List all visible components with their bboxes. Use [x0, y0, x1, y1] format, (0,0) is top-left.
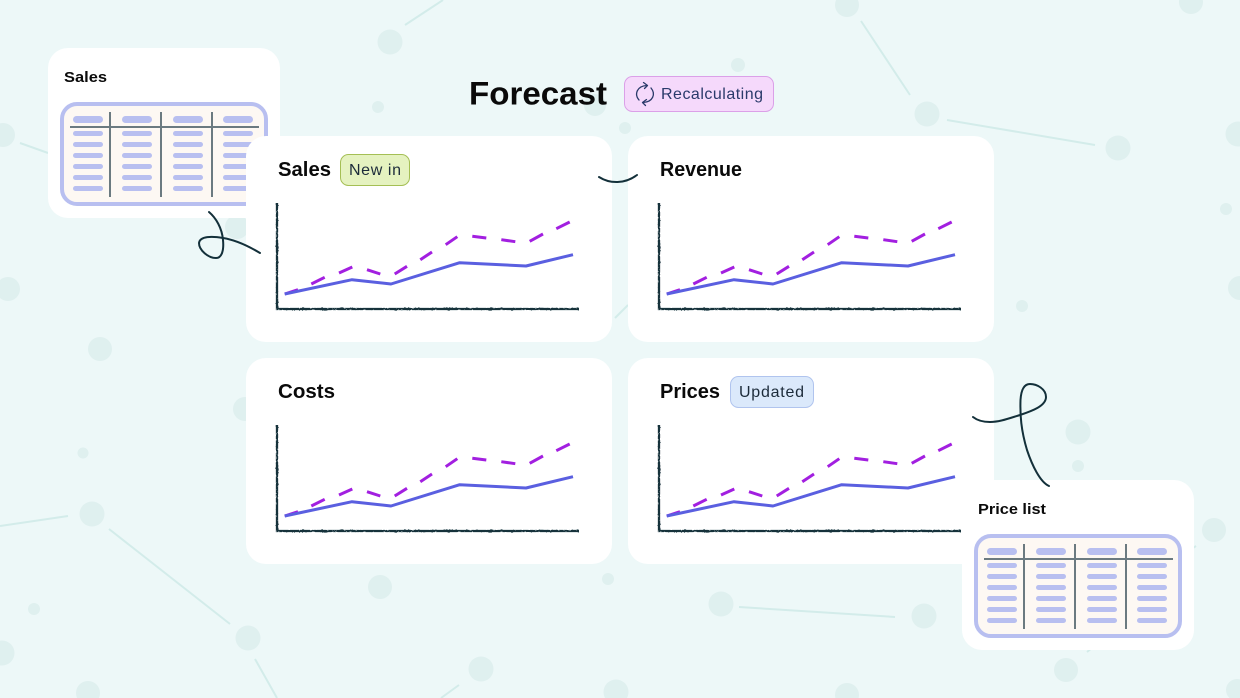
badge: updated — [730, 376, 814, 408]
badge: recalculating — [624, 76, 774, 112]
title: Forecast — [469, 76, 607, 112]
connector: sales table to sales chart — [199, 212, 260, 258]
heading: sales table: Sales — [64, 69, 107, 86]
line chart: revenue — [659, 203, 961, 309]
panel: price list table card — [962, 480, 1194, 650]
badge text: Recalculating — [661, 86, 763, 103]
line chart: sales — [277, 203, 579, 309]
table: price list data — [976, 536, 1180, 636]
line chart: prices — [659, 425, 961, 531]
line chart: costs — [277, 425, 579, 531]
panel: sales source table card — [48, 48, 280, 218]
badge: new in: New in — [349, 162, 401, 179]
panel: revenue chart card — [628, 136, 994, 342]
panel: sales chart card — [246, 136, 612, 342]
badge: updated: Updated — [739, 384, 804, 401]
heading: price list: Price list — [978, 501, 1046, 518]
heading: revenue: Revenue — [660, 159, 742, 181]
badge: new in — [340, 154, 410, 186]
connector: prices chart to price list — [973, 384, 1049, 486]
icon: refresh arrows — [637, 82, 653, 106]
connector: sales chart to revenue chart — [599, 175, 637, 182]
heading: prices: Prices — [660, 381, 720, 403]
heading: sales: Sales — [278, 159, 331, 181]
panel: costs chart card — [246, 358, 612, 564]
table: sales data — [62, 104, 266, 204]
panel: prices chart card — [628, 358, 994, 564]
heading: costs: Costs — [278, 381, 335, 403]
